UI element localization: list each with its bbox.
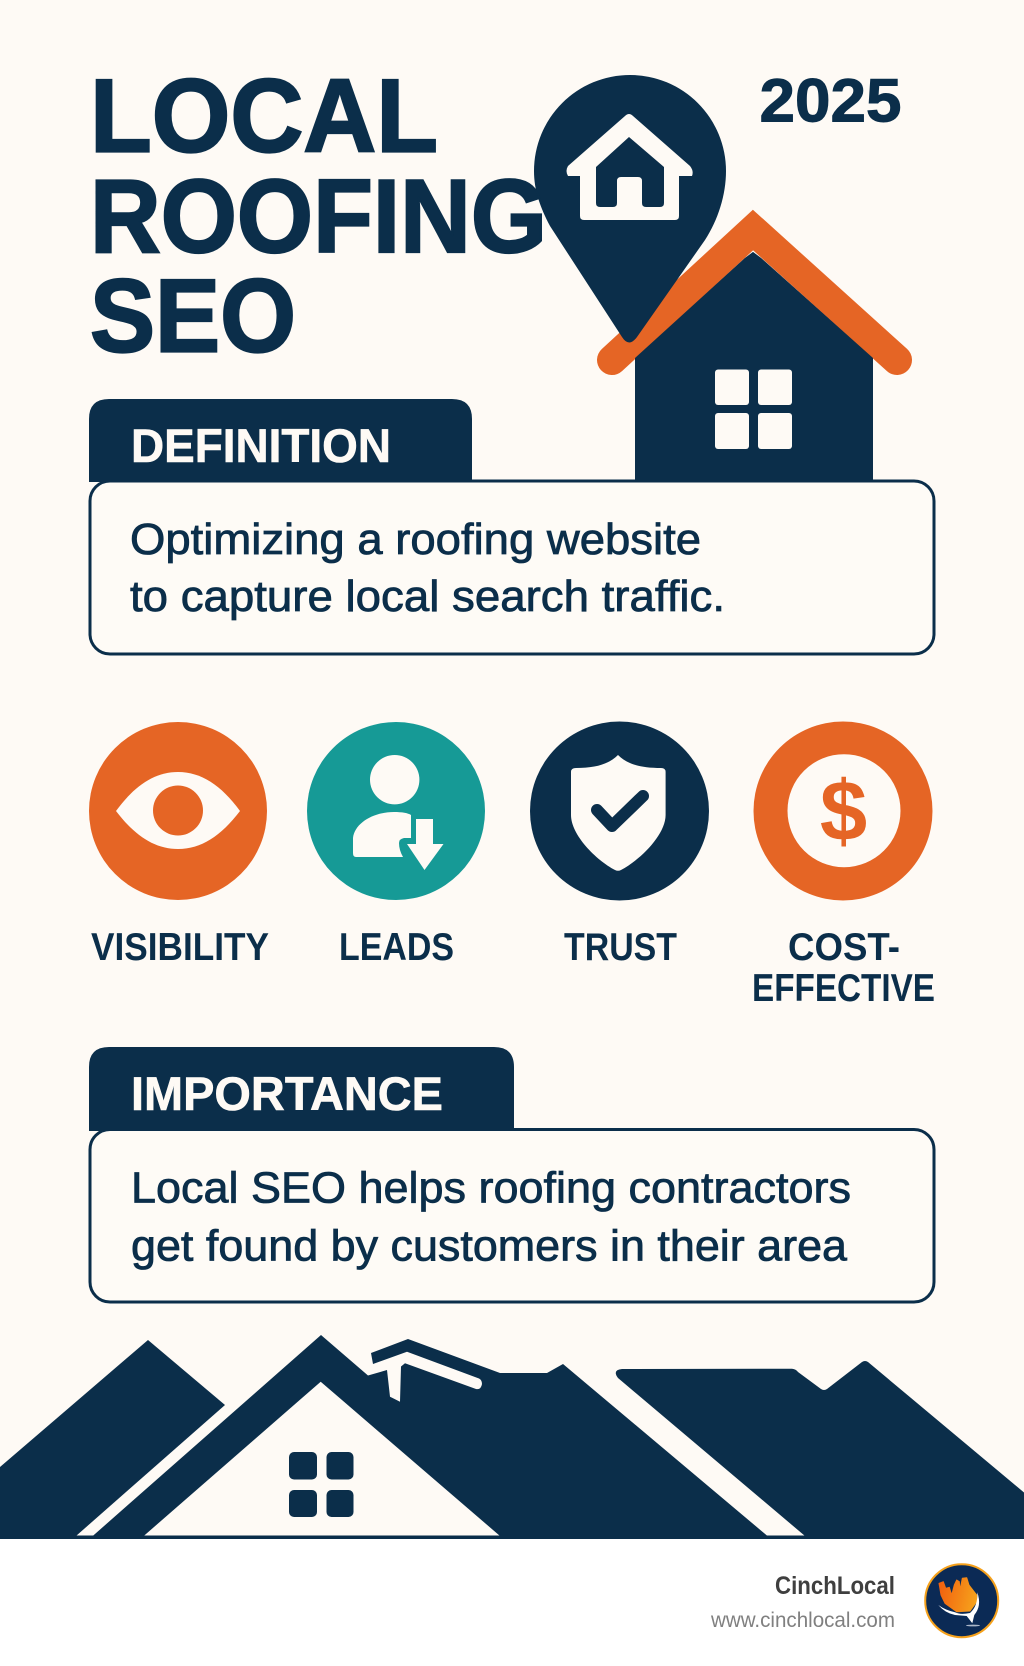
icon: house with orange roof — [612, 230, 897, 481]
ground strip — [0, 1536, 1024, 1539]
importance text — [131, 1164, 851, 1270]
importance text: Local SEO helps roofing contractors — [131, 1164, 851, 1212]
icon: person with down arrow — [307, 722, 485, 900]
definition text: to capture local search traffic. — [130, 572, 725, 621]
right roof — [616, 1361, 1024, 1536]
logo — [925, 1564, 998, 1637]
website: www.cinchlocal.com — [710, 1609, 895, 1632]
title — [90, 58, 547, 374]
importance text: get found by customers in their area — [131, 1222, 848, 1270]
benefit: leads — [307, 722, 485, 969]
definition text — [130, 515, 725, 621]
footer — [0, 1539, 1024, 1666]
gable window — [289, 1452, 354, 1517]
title: SEO — [90, 258, 296, 374]
label: cost-effective: COST- — [788, 926, 900, 969]
label: leads: LEADS — [339, 926, 454, 969]
panel: importance — [89, 1047, 934, 1302]
importance body box — [90, 1130, 934, 1302]
icon: location pin with house — [534, 75, 726, 342]
definition heading: DEFINITION — [131, 419, 391, 472]
importance tab — [89, 1047, 514, 1131]
icon: shield with check — [530, 722, 709, 900]
benefit: cost-effective — [752, 722, 935, 1010]
label: cost-effective: EFFECTIVE — [752, 967, 935, 1010]
left roof — [0, 1340, 225, 1540]
icon: dollar coin: $ — [820, 764, 867, 859]
definition tab — [89, 399, 472, 482]
center roof with vent — [93, 1335, 767, 1536]
definition body box — [90, 481, 934, 654]
year: 2025 — [760, 66, 902, 134]
label: trust: TRUST — [564, 926, 677, 969]
icon: eye — [89, 722, 267, 900]
title: LOCAL — [90, 58, 438, 174]
definition text: Optimizing a roofing website — [130, 515, 701, 564]
benefit: trust — [530, 722, 709, 969]
importance heading: IMPORTANCE — [131, 1067, 443, 1120]
title: ROOFING — [90, 159, 547, 275]
benefit: visibility — [89, 722, 269, 969]
brand name: CinchLocal — [775, 1572, 895, 1600]
label: visibility: VISIBILITY — [91, 926, 269, 969]
icon: dollar coin — [754, 722, 932, 900]
panel: definition — [89, 399, 934, 654]
center gable — [144, 1382, 500, 1536]
rooftop skyline illustration — [0, 1335, 1024, 1540]
label: cost-effective — [752, 926, 935, 1010]
